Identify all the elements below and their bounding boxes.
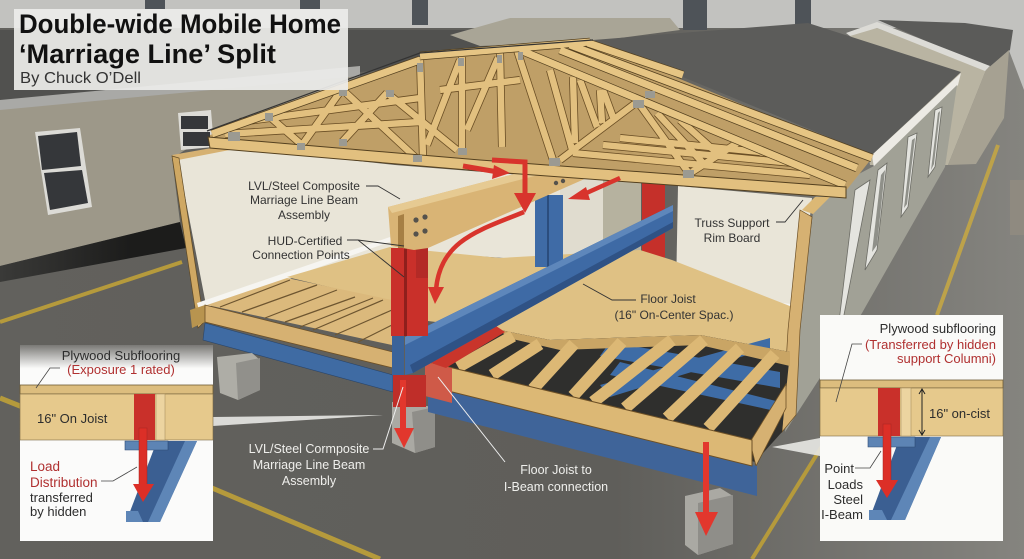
arrow head (514, 193, 536, 213)
point loads text: Point (824, 461, 854, 476)
storage rack at right edge (1010, 180, 1024, 235)
annotation: lower LVL/Steel beam: Marriage Line Beam (253, 458, 365, 472)
bolts (413, 179, 565, 237)
point loads text: Steel (833, 492, 863, 507)
blue rear column (535, 195, 563, 267)
arrow: post to pier (400, 380, 406, 430)
leader lines (836, 344, 881, 468)
background: upper wall right side (800, 0, 1024, 90)
red connection end (425, 362, 452, 403)
joist (20, 394, 213, 440)
joist label: 16" On Joist (37, 411, 108, 426)
leader line (36, 368, 137, 481)
stud (901, 388, 911, 436)
floor stripe markings (0, 145, 998, 559)
heading: Plywood subflooring (880, 321, 996, 336)
left home fascia (0, 66, 360, 112)
dimension label: 16" on-cist (929, 406, 990, 421)
white skirting (197, 237, 800, 311)
load distribution text: Distribution (30, 475, 98, 490)
arrow head (695, 512, 718, 536)
right home roof (878, 20, 1013, 68)
truss rear mass (210, 42, 872, 192)
annotation: floor joist spacing: Floor Joist (640, 292, 696, 306)
pier left (217, 353, 260, 400)
load distribution text: transferred (30, 490, 93, 505)
LVL beam (388, 166, 605, 250)
arrow: rear load (582, 178, 620, 195)
background: rear shed (450, 18, 680, 46)
heading: Plywood Subflooring (62, 348, 180, 363)
left home shadow (0, 222, 186, 282)
white fascia (872, 73, 961, 168)
subfloor strip (20, 385, 213, 394)
gusset plates (228, 52, 694, 178)
load distribution text: by hidden (30, 504, 86, 519)
right exterior siding wall (785, 85, 957, 432)
annotation: lower LVL/Steel beam: LVL/Steel Cormposite (249, 442, 369, 456)
left rim board (205, 305, 393, 368)
annotation: floor joist spacing (583, 284, 733, 322)
front lower blue beam (428, 385, 757, 496)
panel: left detail (20, 345, 213, 541)
background: warehouse upper wall (0, 0, 1024, 28)
point loads text: I-Beam (821, 507, 863, 522)
pier front (685, 488, 733, 555)
annotation: HUD connection points: HUD-Certified (268, 234, 342, 248)
title line two: ‘Marriage Line’ Split (19, 39, 276, 69)
house cutaway (172, 23, 961, 555)
annotation: LVL/Steel composite beam: LVL/Steel Composite (248, 179, 360, 193)
title backing (14, 9, 348, 90)
red strip behind rim (428, 326, 505, 368)
truss chord ridge edge (207, 40, 593, 131)
load arrow (876, 424, 898, 498)
side windows (838, 107, 942, 330)
heading note: (Exposure 1 rated) (67, 362, 175, 377)
window glass (872, 111, 940, 252)
red column (134, 394, 155, 440)
right home side wall (948, 50, 1009, 165)
annotation: lower LVL/Steel beam: Assembly (282, 474, 337, 488)
interior cream back wall (560, 178, 640, 262)
steel I-beam main (392, 205, 673, 375)
steel I-beam (868, 437, 941, 520)
title: Double-wide Mobile Home (19, 9, 341, 39)
truss bottom chord (208, 137, 846, 198)
load distribution text (30, 459, 98, 519)
side joists near right end (750, 384, 786, 466)
annotation: truss support rim board: Truss Support (695, 216, 770, 230)
arrow: load curve to post (436, 212, 524, 290)
byline: By Chuck O’Dell (20, 70, 141, 87)
interior cream wall left (178, 148, 560, 305)
annotation: HUD connection points: Connection Points (252, 248, 350, 262)
background: ceiling columns (145, 0, 811, 30)
subfloor strip (820, 380, 1003, 388)
right home wall (850, 28, 986, 165)
pier centre (392, 402, 435, 453)
red column (878, 388, 900, 436)
annotation: floor joist to I-beam: I-Beam connection (504, 480, 608, 494)
back wall darker bay (603, 178, 641, 260)
left wall foot (190, 305, 205, 328)
heading note line two: support Columni) (897, 351, 996, 366)
right home fascia (846, 22, 990, 71)
red lower column (393, 375, 426, 407)
annotation: HUD connection points (252, 234, 404, 277)
red load path arrows (394, 160, 718, 536)
point loads text (821, 461, 863, 522)
red front post (391, 248, 428, 336)
callout connector right (772, 438, 820, 456)
background: rear dark roof band (0, 30, 600, 108)
arrow head (492, 165, 510, 179)
annotation: truss support rim board (695, 200, 803, 245)
background: left mobile home (0, 66, 360, 282)
stud (156, 394, 165, 440)
load arrow (133, 428, 154, 502)
annotation: LVL/Steel composite beam (248, 179, 400, 222)
panel: right detail (820, 315, 1003, 541)
post cap (802, 197, 830, 214)
front joist bay dark (430, 330, 790, 462)
left home window (35, 128, 92, 215)
load distribution text: Load (30, 459, 60, 474)
annotation: floor joist to I-beam (438, 377, 608, 494)
arrow: load into beam from truss (463, 166, 498, 172)
arrow: front beam to pier (703, 442, 709, 515)
background: right mobile home (846, 20, 1013, 165)
wood rim right corner post (782, 197, 830, 432)
annotation: LVL/Steel composite beam: Marriage Line Beam (250, 193, 358, 207)
dimension arrow (919, 389, 925, 435)
steel I-beam (125, 441, 197, 522)
annotation: floor joist spacing: (16" On-Center Spac.) (615, 308, 733, 322)
cream wall top cap (172, 143, 240, 162)
truss top chords (212, 42, 872, 185)
left joist deck (207, 278, 392, 345)
plywood floor rear (287, 247, 800, 352)
arrow: vertical load path (492, 160, 525, 196)
panel background (20, 345, 213, 541)
point loads text: Loads (828, 477, 863, 492)
annotation: LVL/Steel composite beam: Assembly (278, 208, 330, 222)
roof shingles (593, 23, 961, 155)
annotation: lower LVL/Steel beam (249, 387, 403, 488)
red rear column (642, 178, 665, 260)
arrow head (428, 287, 444, 304)
interior left end post (172, 156, 204, 328)
joist (820, 388, 1003, 436)
blue steel seen through joists (600, 338, 780, 412)
truss web lumber (225, 50, 810, 175)
arrow head (394, 428, 414, 448)
arrow head (568, 187, 590, 200)
title block (14, 9, 348, 90)
left home siding (0, 76, 360, 266)
front rim board (428, 362, 752, 466)
annotation: truss support rim board: Rim Board (704, 231, 760, 245)
annotation: floor joist to I-beam: Floor Joist to (520, 463, 592, 477)
interior cream wall right (676, 186, 812, 308)
left home small window (178, 110, 214, 150)
callout connector left (213, 415, 383, 426)
floor joists front (458, 336, 775, 428)
heading note: (Transferred by hidden (865, 337, 996, 352)
panel background (820, 315, 1003, 541)
left underfloor blue beam (203, 323, 393, 392)
plywood edge strip (500, 330, 790, 366)
